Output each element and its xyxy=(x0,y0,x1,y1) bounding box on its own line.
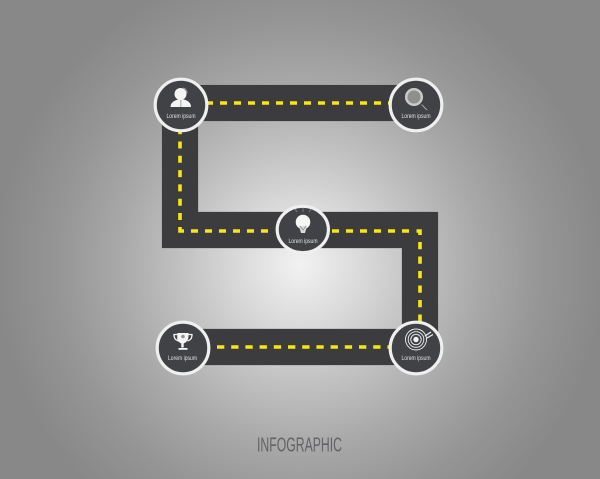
label: Lorem ipsum xyxy=(168,356,197,362)
title: INFOGRAPHIC xyxy=(257,434,342,456)
yellow dashed centre line xyxy=(180,103,420,347)
label: Lorem ipsum xyxy=(166,114,196,120)
node: target xyxy=(390,322,442,374)
icon: light bulb xyxy=(295,208,311,233)
node: magnifier xyxy=(390,79,442,131)
label: Lorem ipsum xyxy=(402,356,430,362)
node: person xyxy=(155,79,207,131)
label: Lorem ipsum xyxy=(288,239,318,245)
icon: trophy xyxy=(174,333,192,350)
icon: target xyxy=(406,329,433,350)
S-shaped road xyxy=(180,103,420,347)
label: Lorem ipsum xyxy=(402,114,430,120)
node: light bulb xyxy=(277,206,328,253)
node: trophy xyxy=(157,322,209,374)
icon: magnifying glass xyxy=(406,89,427,110)
icon: person xyxy=(170,88,191,107)
